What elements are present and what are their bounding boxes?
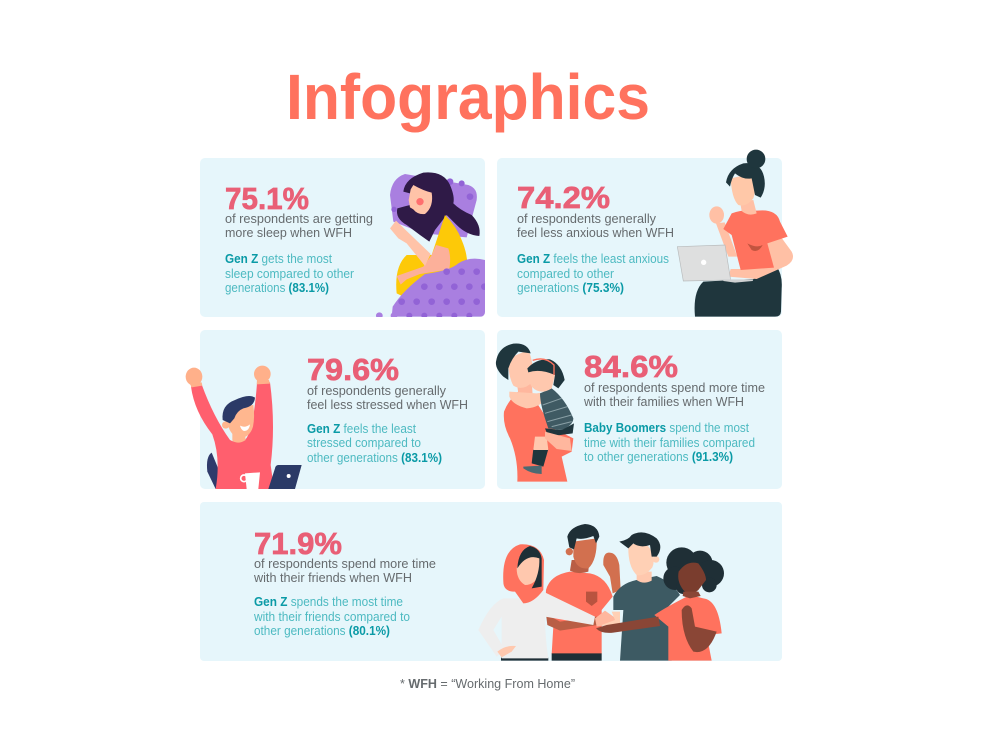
statistic: 71.9%: 71.9% xyxy=(254,526,342,561)
text: sleep generation note: sleep compared to other xyxy=(225,267,354,281)
text: anxiety description xyxy=(517,212,674,240)
icon: four friends joining hands xyxy=(478,524,724,661)
text: anxiety generation note: compared to other xyxy=(517,267,614,281)
text: sleep description: more sleep when WFH xyxy=(225,226,352,240)
icon: woman with laptop xyxy=(677,150,793,317)
text: anxiety description: of respondents generally xyxy=(517,212,657,226)
panel: less stressed xyxy=(186,330,485,489)
text: sleep generation note xyxy=(225,252,354,295)
panel: less anxious xyxy=(497,150,793,317)
text: anxiety generation note xyxy=(517,252,669,295)
text: family description xyxy=(583,381,765,409)
footnote: * WFH = “Working From Home” xyxy=(400,677,575,691)
text: family description: with their families when WFH xyxy=(583,395,744,409)
statistic: 74.2%: 74.2% xyxy=(517,180,610,215)
icon: father hugging child xyxy=(496,344,574,482)
text: stress generation note xyxy=(307,422,442,465)
text: friends generation note: with their friends compared to xyxy=(253,610,410,624)
text: stress description: feel less stressed when WFH xyxy=(307,398,468,412)
icon: sleeping woman xyxy=(376,172,488,319)
text: friends generation note: Gen Z spends the most time xyxy=(254,595,403,609)
text: family generation note xyxy=(584,421,755,464)
text: friends generation note: other generations (80.1%) xyxy=(254,624,390,638)
text: family generation note: time with their families compared xyxy=(584,436,755,450)
icon: cheering man at laptop xyxy=(186,366,302,489)
text: stress generation note: Gen Z feels the least xyxy=(307,422,416,436)
text: sleep description: of respondents are getting xyxy=(225,212,373,226)
statistic: 75.1%: 75.1% xyxy=(225,181,309,216)
text: sleep generation note: generations (83.1%) xyxy=(225,281,329,295)
text: anxiety description: feel less anxious when WFH xyxy=(517,226,674,240)
text: family generation note: Baby Boomers spend the most xyxy=(584,421,749,435)
panel: more sleep xyxy=(200,158,488,319)
text: family generation note: to other generations (91.3%) xyxy=(584,450,733,464)
panel: friend time xyxy=(200,502,782,661)
statistic: 79.6%: 79.6% xyxy=(307,352,399,387)
panel: family time xyxy=(496,330,782,489)
text: stress generation note: other generations (83.1%) xyxy=(307,451,442,465)
text: stress generation note: stressed compared to xyxy=(307,436,421,450)
text: sleep description xyxy=(225,212,373,240)
text: friends generation note xyxy=(253,595,410,638)
text: stress description xyxy=(307,384,468,412)
text: family description: of respondents spend more time xyxy=(584,381,765,395)
statistic: 84.6%: 84.6% xyxy=(584,349,678,384)
text: friends description xyxy=(253,557,436,585)
text: anxiety generation note: Gen Z feels the least anxious xyxy=(517,252,669,266)
text: friends description: of respondents spend more time xyxy=(254,557,436,571)
text: friends description: with their friends when WFH xyxy=(253,571,412,585)
title: Infographics xyxy=(286,61,650,133)
text: sleep generation note: Gen Z gets the most xyxy=(225,252,332,266)
text: stress description: of respondents generally xyxy=(307,384,447,398)
text: anxiety generation note: generations (75.3%) xyxy=(517,281,624,295)
